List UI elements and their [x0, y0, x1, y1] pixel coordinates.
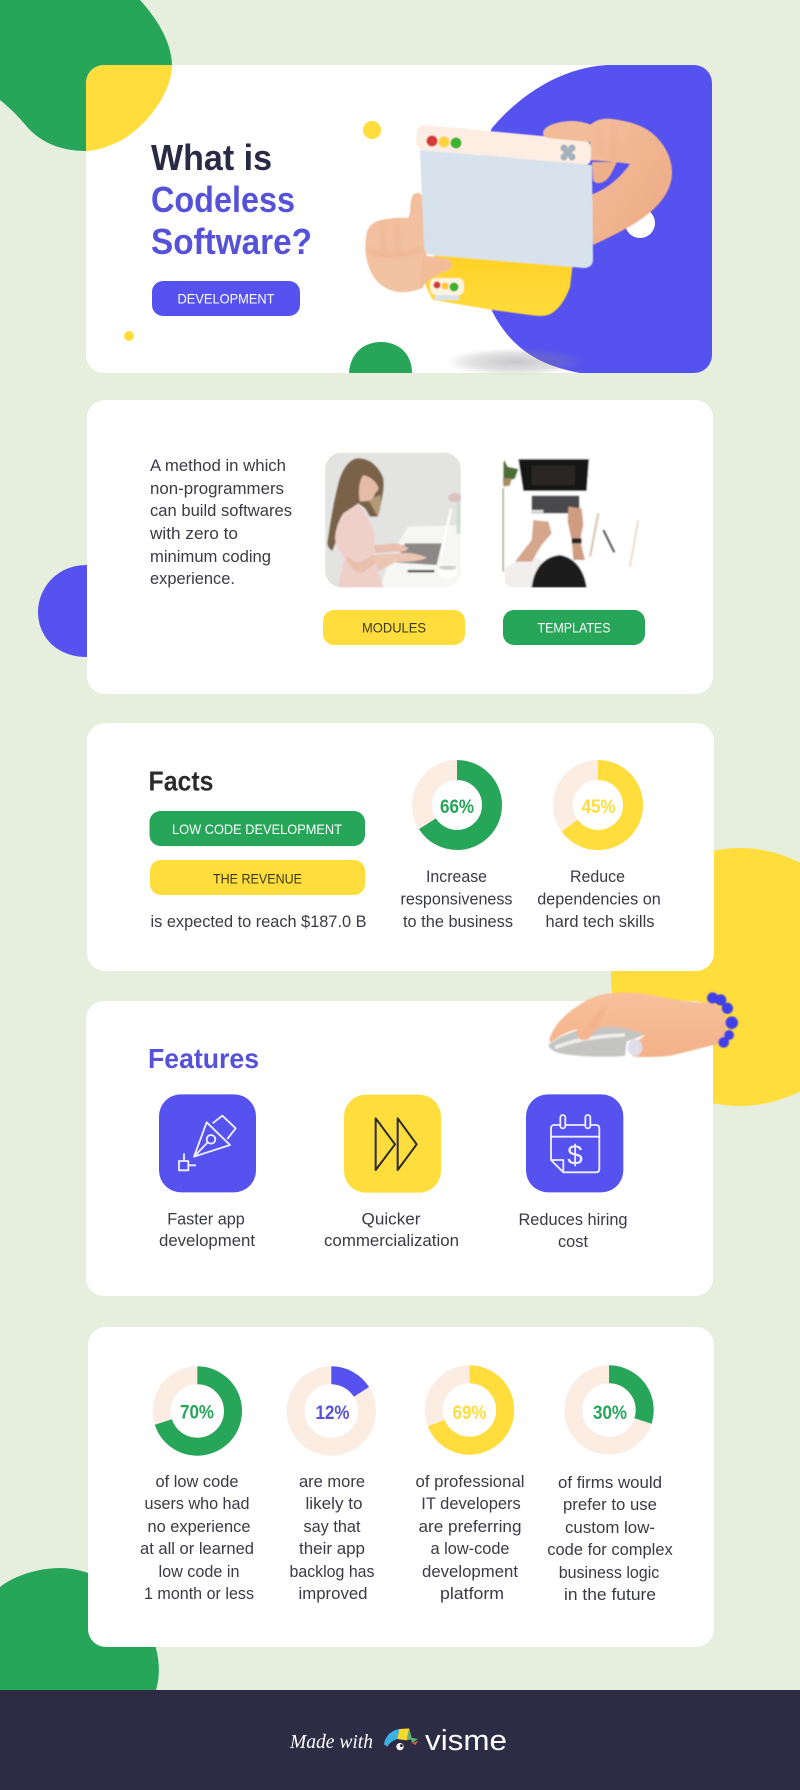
title: Software? [151, 221, 312, 262]
text: firms [547, 1474, 673, 1604]
label: reduces hiring cost: Reduces hiring [518, 1211, 628, 1229]
text: low code users [140, 1473, 254, 1603]
definition text: minimum coding [150, 548, 271, 566]
photo: overhead laptop [502, 455, 642, 588]
donut chart: 66% [422, 770, 492, 840]
text: app backlog: their app [299, 1540, 365, 1558]
donut chart: 66%: 66% [440, 797, 474, 818]
photo: woman typing at laptop [325, 452, 462, 588]
donut chart: 69%: 69% [452, 1403, 487, 1424]
hero yellow corner blob [86, 65, 172, 151]
button: templates: TEMPLATES [538, 620, 610, 636]
illustration: hand on mouse [548, 992, 738, 1057]
donut chart: 30% [573, 1374, 645, 1446]
button: low code development [150, 811, 365, 846]
definition text [149, 457, 292, 588]
text: professional developers: a low-code [430, 1540, 510, 1558]
text: firms: of firms would [558, 1474, 662, 1492]
definition text: with zero to [149, 525, 238, 543]
panel: facts [87, 723, 714, 971]
button: the revenue [150, 860, 365, 895]
text: firms: custom low- [565, 1519, 655, 1537]
text: professional developers [416, 1473, 524, 1603]
label: reduce dependencies: dependencies on [537, 890, 661, 908]
revenue text: is expected to reach $187.0 B [150, 913, 366, 931]
text: visme wordmark: visme [425, 1725, 507, 1757]
hero yellow dot small [124, 331, 134, 341]
text: firms: business logic [559, 1564, 659, 1582]
donut chart: 12% [296, 1375, 367, 1447]
donut chart: 30%: 30% [593, 1403, 627, 1424]
text: low code users: 1 month or less [144, 1585, 254, 1603]
definition text: non-programmers [150, 480, 284, 498]
donut chart: 70%: 70% [180, 1402, 214, 1424]
label: reduce dependencies: Reduce [570, 868, 625, 886]
hero green half circle [349, 342, 412, 373]
label: faster app development: development [159, 1232, 255, 1250]
blob: big yellow right [611, 848, 800, 1106]
panel: definition [87, 400, 713, 694]
panel: features [86, 992, 738, 1296]
text: professional developers: are preferring [418, 1518, 522, 1536]
hero white dot [625, 208, 655, 238]
label: reduces hiring cost [518, 1211, 628, 1251]
donut chart: 69% [434, 1374, 505, 1446]
text: app backlog: backlog has [290, 1563, 374, 1581]
icon: calendar with dollar [526, 1094, 623, 1192]
icon: fast forward [344, 1095, 441, 1193]
donut chart: 45%: 45% [582, 797, 616, 818]
text: app backlog: are more [299, 1473, 365, 1491]
label: increase responsiveness [400, 868, 513, 931]
icon: calendar with dollar: $ [567, 1139, 583, 1170]
title: What is [151, 137, 272, 178]
text: app backlog [290, 1473, 374, 1603]
panel: hero [86, 65, 712, 374]
button: low code development: LOW CODE DEVELOPMENT [172, 821, 342, 837]
label: quicker commercialization: commercialization [324, 1232, 459, 1250]
button: modules [323, 610, 465, 645]
definition text: A method in which [150, 457, 286, 475]
text: low code users: at all or learned [140, 1540, 254, 1558]
hero yellow dot large [363, 121, 381, 139]
text: professional developers: platform [440, 1585, 504, 1603]
label: quicker commercialization: Quicker [362, 1210, 421, 1228]
label: quicker commercialization [324, 1210, 459, 1250]
button: development [152, 281, 300, 316]
label: reduce dependencies: hard tech skills [546, 913, 654, 931]
label: faster app development: Faster app [167, 1210, 245, 1228]
text: firms: in the future [564, 1586, 656, 1604]
definition text: experience. [150, 570, 235, 588]
icon: pen tool [159, 1094, 256, 1192]
panel: statistics [88, 1327, 714, 1647]
text: low code users: users who had [144, 1495, 250, 1513]
text: low code users: no experience [148, 1518, 250, 1536]
heading: features: Features [148, 1043, 259, 1074]
blob: bottom-left green [0, 1568, 159, 1690]
text: low code users: of low code [156, 1473, 238, 1491]
text: firms: prefer to use [563, 1496, 657, 1514]
footer made with: Made with [289, 1731, 373, 1753]
donut chart: 12%: 12% [316, 1403, 350, 1424]
text: firms: code for complex [547, 1541, 673, 1559]
hero purple shape [475, 65, 712, 373]
heading: facts: Facts [148, 766, 214, 796]
donut chart: 45% [563, 770, 633, 840]
label: reduce dependencies [537, 868, 661, 931]
title [151, 137, 312, 262]
text: professional developers: IT developers [421, 1495, 521, 1513]
button: development: DEVELOPMENT [178, 290, 275, 306]
text: app backlog: say that [304, 1518, 361, 1536]
label: increase responsiveness: to the business [403, 913, 513, 931]
blob: purple half circle left [38, 565, 87, 657]
definition text: can build softwares [150, 502, 292, 520]
text: professional developers: development [422, 1563, 518, 1581]
text: low code users: low code in [158, 1563, 240, 1581]
button: the revenue: THE REVENUE [213, 870, 302, 886]
donut chart: 70% [162, 1375, 233, 1447]
label: increase responsiveness: responsiveness [400, 890, 512, 908]
footer [0, 1690, 800, 1790]
text: app backlog: likely to [306, 1495, 362, 1513]
button: templates [503, 610, 645, 645]
blob: top-left green [0, 0, 172, 151]
icon: visme logo [384, 1728, 418, 1750]
label: reduces hiring cost: cost [558, 1233, 588, 1251]
title: Codeless [151, 179, 295, 220]
label: faster app development [159, 1210, 255, 1250]
hero ground shadow [445, 348, 585, 376]
illustration: hands holding window [365, 119, 672, 316]
button: modules: MODULES [362, 620, 426, 636]
text: app backlog: improved [298, 1585, 368, 1603]
text: professional developers: of professional [416, 1473, 524, 1491]
label: increase responsiveness: Increase [426, 868, 487, 886]
